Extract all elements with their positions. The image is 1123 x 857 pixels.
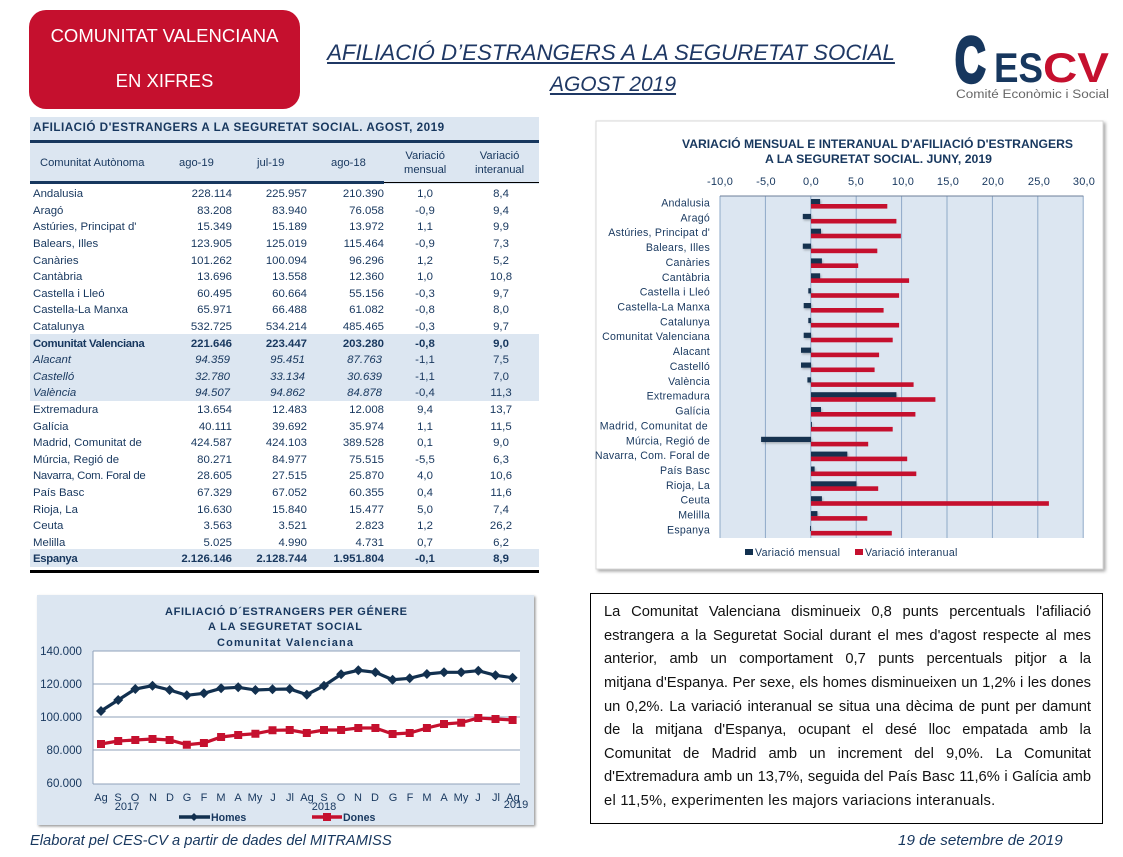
- row: Galícia: [33, 421, 512, 433]
- bar chart panel: variació mensual e interanual: [595, 120, 1108, 574]
- row: Astúries: 15.349: [197, 221, 232, 233]
- text block: summary: anterior, amb un comportament 0,7 punts percentuals pitjor a la: [604, 651, 1091, 667]
- row: Canàries: 96.296: [349, 255, 384, 267]
- row: Rioja: 15.840: [272, 504, 307, 516]
- row: Rioja: Rioja, La: [33, 504, 78, 516]
- row: Rioja: 7,4: [493, 504, 509, 516]
- row: Alacant: Alacant: [33, 354, 71, 366]
- category labels: Múrcia, Regió de: [626, 435, 710, 447]
- row: Navarra: 4,0: [417, 470, 433, 482]
- row: Galícia: 11,5: [490, 421, 512, 433]
- row: Alacant: [32, 354, 509, 366]
- table title band: [30, 117, 539, 140]
- x axis labels: Ag: [506, 792, 520, 804]
- row: Rioja: [33, 504, 509, 516]
- text block: summary: un 0,2%. La variació interanual se situa una dècima de punt per damunt: [604, 699, 1091, 715]
- x axis labels: J: [270, 792, 276, 804]
- row: Galícia: Galícia: [33, 421, 68, 433]
- row: Múrcia: 75.515: [349, 454, 384, 466]
- row: Alacant: 87.763: [347, 354, 382, 366]
- row: Alacant: 7,5: [493, 354, 509, 366]
- row: Aragó: Aragó: [33, 205, 63, 217]
- row: Balears: -0,9: [415, 238, 435, 250]
- row: Madrid: [33, 437, 509, 449]
- table header: Variació: [405, 150, 445, 162]
- x axis labels: N: [354, 792, 362, 804]
- row: País Basc: 67.329: [197, 487, 232, 499]
- row: Comunitat Valenciana: [33, 338, 509, 350]
- legend: Dones: [343, 812, 375, 824]
- row: Ceuta: [33, 520, 512, 532]
- row: Castelló: 33.134: [270, 371, 305, 383]
- category labels: Astúries, Principat d': [608, 227, 710, 239]
- row: Cantàbria: [33, 271, 512, 283]
- category labels: País Basc: [660, 465, 710, 477]
- row: Castelló: [33, 371, 509, 383]
- row: Múrcia: [33, 454, 509, 466]
- category labels: Castella i Lleó: [640, 287, 710, 299]
- text block: summary: d'Extremadura amb un 13,7%, seguida del País Basc 11,6% i Galícia amb: [604, 769, 1091, 785]
- row: Comunitat Valenciana: 9,0: [493, 338, 509, 350]
- row: Melilla: [33, 537, 509, 549]
- x axis labels: 2017: [115, 801, 139, 813]
- y axis labels: 60.000: [47, 777, 82, 790]
- category labels: Alacant: [673, 346, 710, 358]
- row: Múrcia: -5,5: [415, 454, 435, 466]
- category labels: Galícia: [675, 406, 710, 418]
- row: Madrid: 0,1: [417, 437, 433, 449]
- row: Astúries: [33, 221, 509, 233]
- row: Múrcia: 84.977: [272, 454, 307, 466]
- chart title: [165, 605, 407, 649]
- x axis labels: S: [114, 792, 122, 804]
- row: Canàries: 5,2: [493, 255, 509, 267]
- series: variació mensual: [761, 199, 896, 531]
- row: Castella i Lleó: [33, 288, 509, 300]
- plot background: [720, 196, 1083, 538]
- row: València: 11,3: [490, 387, 512, 399]
- row: País Basc: [33, 487, 512, 499]
- legend: [745, 547, 958, 559]
- row: Aragó: 83.940: [272, 205, 307, 217]
- row: Castelló: 32.780: [195, 371, 230, 383]
- row: Madrid: 9,0: [493, 437, 509, 449]
- table header: ago-18: [331, 157, 366, 169]
- row: Castella-La Manxa: 66.488: [272, 304, 307, 316]
- axis labels: 0,0: [803, 176, 819, 188]
- category labels: Canàries: [666, 257, 710, 269]
- row: Cantàbria: 13.558: [272, 271, 307, 283]
- table header: jul-19: [257, 157, 284, 169]
- row: Alacant: -1,1: [415, 354, 435, 366]
- row: Castella-La Manxa: Castella-La Manxa: [33, 304, 128, 316]
- row: Balears: 115.464: [344, 238, 384, 250]
- row: Catalunya: 534.214: [266, 321, 307, 333]
- category labels: Ceuta: [680, 495, 710, 507]
- row: Espanya: 2.128.744: [256, 553, 307, 565]
- row: Alacant: 94.359: [195, 354, 230, 366]
- chart title: A LA SEGURETAT SOCIAL. JUNY, 2019: [765, 152, 992, 166]
- row: Múrcia: Múrcia, Regió de: [33, 454, 119, 466]
- row: València: [33, 387, 512, 399]
- row: Madrid: Madrid, Comunitat de: [33, 437, 142, 449]
- row: Canàries: [33, 255, 509, 267]
- row: Castelló: -1,1: [415, 371, 435, 383]
- category labels: Andalusia: [661, 198, 710, 210]
- text block: summary: La Comunitat Valenciana disminueix 0,8 punts percentuals l'afiliació: [604, 604, 1091, 620]
- row: Balears: 123.905: [191, 238, 232, 250]
- category labels: Espanya: [667, 524, 710, 536]
- row: Extremadura: 12.483: [272, 404, 307, 416]
- row: Comunitat Valenciana: 223.447: [266, 338, 307, 350]
- chart title: [682, 137, 1073, 166]
- legend: Homes: [211, 812, 246, 824]
- row: Catalunya: 9,7: [493, 321, 509, 333]
- row: València: València: [33, 387, 76, 399]
- table panel: afiliació per comunitat: [30, 117, 539, 573]
- category labels: Aragó: [680, 212, 710, 224]
- row: Madrid: 424.587: [191, 437, 232, 449]
- row: Navarra: [33, 470, 512, 482]
- y axis labels: 140.000: [40, 645, 82, 658]
- x axis labels: S: [320, 792, 328, 804]
- x axis labels: F: [407, 792, 414, 804]
- x axis labels: Ag: [94, 792, 108, 804]
- axis labels: -5,0: [756, 176, 776, 188]
- row: Castella-La Manxa: 65.971: [197, 304, 232, 316]
- row: Castella i Lleó: 60.664: [272, 288, 307, 300]
- row: Castelló: Castelló: [33, 371, 74, 383]
- row: Catalunya: [33, 321, 509, 333]
- row: Aragó: [33, 205, 509, 217]
- category labels: Cantàbria: [662, 272, 710, 284]
- row: Canàries: 100.094: [266, 255, 307, 267]
- legend: [179, 812, 375, 824]
- text block: summary: de la mitjana d'Espanya, ocupant el desé lloc empatada amb la: [604, 722, 1091, 738]
- row: País Basc: País Basc: [33, 487, 84, 499]
- badge: Comunitat Valenciana en xifres: [29, 10, 300, 109]
- x axis labels: A: [234, 792, 242, 804]
- row: Castella-La Manxa: -0,8: [415, 304, 435, 316]
- text block: summary: mitjana d'Espanya. Per sexe, els homes disminueixen un 1,2% i les dones: [604, 675, 1091, 691]
- row: Madrid: 424.103: [266, 437, 307, 449]
- row: Balears: 125.019: [266, 238, 307, 250]
- row: Castelló: 30.639: [347, 371, 382, 383]
- x axis labels: O: [337, 792, 346, 804]
- row: Aragó: 83.208: [197, 205, 232, 217]
- row: Extremadura: 9,4: [417, 404, 433, 416]
- row: Astúries: 15.189: [272, 221, 307, 233]
- row: Extremadura: Extremadura: [33, 404, 98, 416]
- series: homes: [96, 665, 518, 716]
- row: Catalunya: Catalunya: [33, 321, 84, 333]
- axis labels: 10,0: [892, 176, 914, 188]
- axis labels: 25,0: [1028, 176, 1050, 188]
- plot area: [93, 651, 520, 784]
- x axis labels: A: [440, 792, 448, 804]
- row: Múrcia: 80.271: [197, 454, 232, 466]
- x axis labels: Jl: [286, 792, 294, 804]
- row: Castella i Lleó: Castella i Lleó: [33, 288, 105, 300]
- table header: ago-19: [179, 157, 214, 169]
- row: Navarra: Navarra, Com. Foral de: [33, 470, 145, 482]
- footer: source: Elaborat pel CES-CV a partir de dades del MITRAMISS: [30, 833, 392, 849]
- row: Múrcia: 6,3: [493, 454, 509, 466]
- chart title: Comunitat Valenciana: [217, 637, 354, 649]
- row: Galícia: 35.974: [349, 421, 384, 433]
- chart title: VARIACIÓ MENSUAL E INTERANUAL D'AFILIACIÓ D'ESTRANGERS: [682, 137, 1073, 151]
- row: València: 84.878: [347, 387, 382, 399]
- x axis labels: Ag: [300, 792, 314, 804]
- row: Comunitat Valenciana: Comunitat Valenciana: [33, 338, 144, 350]
- subtitle: AGOST 2019: [550, 73, 676, 96]
- row: Melilla: 6,2: [493, 537, 509, 549]
- category labels: Extremadura: [647, 391, 710, 403]
- row: Castelló: 7,0: [493, 371, 509, 383]
- logo: CES-CV: Comité Econòmic i Social: [956, 87, 1109, 101]
- row: Andalusia: [33, 188, 509, 200]
- row: Navarra: 25.870: [349, 470, 384, 482]
- row: Castella i Lleó: 9,7: [493, 288, 509, 300]
- legend: Variació mensual: [755, 547, 840, 559]
- chart title: AFILIACIÓ D´ESTRANGERS PER GÉNERE: [165, 605, 407, 618]
- table title band: AFILIACIÓ D'ESTRANGERS A LA SEGURETAT SOCIAL. AGOST, 2019: [33, 121, 445, 134]
- x axis labels: M: [422, 792, 432, 804]
- row: Astúries: 1,1: [417, 221, 433, 233]
- row: Andalusia: 1,0: [417, 188, 433, 200]
- row: Ceuta: Ceuta: [33, 520, 63, 532]
- row: Balears: Balears, Illes: [33, 238, 98, 250]
- row: Aragó: 76.058: [349, 205, 384, 217]
- y axis labels: 100.000: [40, 711, 82, 724]
- axis labels: 30,0: [1073, 176, 1095, 188]
- x axis labels: M: [216, 792, 226, 804]
- row: València: -0,4: [415, 387, 435, 399]
- row: País Basc: 0,4: [417, 487, 433, 499]
- y axis labels: 80.000: [47, 744, 82, 757]
- row: Melilla: 0,7: [417, 537, 433, 549]
- highlighted block: Comunitat Valenciana: [30, 334, 539, 401]
- row: Balears: [33, 238, 509, 250]
- category labels: Navarra, Com. Foral de: [595, 450, 710, 462]
- row: Ceuta: 1,2: [417, 520, 433, 532]
- axis labels: 20,0: [982, 176, 1004, 188]
- x axis labels: O: [131, 792, 140, 804]
- text block: summary: estrangera a la Seguretat Social durant el mes d'agost respecte al mes: [604, 628, 1091, 644]
- axis labels: [707, 176, 1095, 188]
- row: Canàries: Canàries: [33, 255, 79, 267]
- table header: Comunitat Autònoma: [40, 157, 144, 169]
- badge: Comunitat Valenciana en xifres: EN XIFRES: [116, 70, 213, 91]
- row: Cantàbria: 10,8: [490, 271, 512, 283]
- x axis labels: [94, 792, 528, 813]
- table bottom rule: [30, 570, 539, 573]
- logo: CES-CV: [955, 30, 1109, 101]
- highlighted row band: Espanya: [30, 549, 539, 567]
- line chart panel: afiliació per gènere: [37, 595, 537, 828]
- y axis labels: [40, 645, 82, 790]
- row: Castella-La Manxa: 61.082: [349, 304, 384, 316]
- row: Espanya: Espanya: [33, 553, 77, 565]
- series: variació interanual: [811, 204, 1049, 536]
- category labels: Castelló: [670, 361, 710, 373]
- category labels: Madrid, Comunitat de: [600, 420, 708, 432]
- x axis labels: Jl: [492, 792, 500, 804]
- row: Espanya: 8,9: [493, 553, 509, 565]
- legend: Variació interanual: [865, 547, 958, 559]
- row: Catalunya: -0,3: [415, 321, 435, 333]
- category labels: Rioja, La: [666, 480, 710, 492]
- row: València: 94.862: [270, 387, 305, 399]
- text block: summary: Comunitat de Madrid amb un increment del 9,0%. La Comunitat: [604, 746, 1091, 762]
- row: País Basc: 60.355: [349, 487, 384, 499]
- x axis labels: G: [389, 792, 397, 804]
- row: Extremadura: 13,7: [490, 404, 512, 416]
- row: Extremadura: [33, 404, 512, 416]
- row: Andalusia: 8,4: [493, 188, 509, 200]
- row: Melilla: 5.025: [203, 537, 232, 549]
- row: Andalusia: 225.957: [266, 188, 307, 200]
- category labels: Castella-La Manxa: [617, 302, 710, 314]
- series: dones: [97, 714, 517, 749]
- row: Canàries: 1,2: [417, 255, 433, 267]
- row: Castella i Lleó: 55.156: [349, 288, 384, 300]
- row: Alacant: 95.451: [270, 354, 305, 366]
- logo: CES-CV: CV: [1043, 44, 1109, 91]
- row: Castella-La Manxa: 8,0: [493, 304, 509, 316]
- row: Balears: 7,3: [493, 238, 509, 250]
- chart title: A LA SEGURETAT SOCIAL: [208, 621, 362, 633]
- category labels: Comunitat Valenciana: [602, 331, 710, 343]
- x axis labels: My: [248, 792, 263, 804]
- row: Madrid: 389.528: [343, 437, 384, 449]
- logo: CES-CV: ES: [994, 44, 1043, 91]
- row: Melilla: 4.731: [355, 537, 384, 549]
- text block: summary: el 11,5%, experimenten les majors variacions interanuals.: [604, 793, 996, 809]
- row: Navarra: 10,6: [490, 470, 512, 482]
- row: Castella i Lleó: 60.495: [197, 288, 232, 300]
- text block: summary: [590, 593, 1103, 824]
- row: Rioja: 15.477: [349, 504, 384, 516]
- x axis labels: D: [371, 792, 379, 804]
- row: Ceuta: 3.521: [278, 520, 307, 532]
- row: Espanya: [33, 553, 509, 565]
- title: AFILIACIÓ D’ESTRANGERS A LA SEGURETAT SOCIAL: [327, 40, 895, 65]
- row: Rioja: 5,0: [417, 504, 433, 516]
- row: Comunitat Valenciana: 203.280: [343, 338, 384, 350]
- axis labels: -10,0: [707, 176, 733, 188]
- row: Ceuta: 3.563: [203, 520, 232, 532]
- footer: date: 19 de setembre de 2019: [898, 832, 1063, 849]
- category labels: Melilla: [678, 510, 710, 522]
- row: Comunitat Valenciana: 221.646: [191, 338, 232, 350]
- category labels: [595, 198, 710, 536]
- table header: mensual: [404, 164, 446, 176]
- x axis labels: G: [183, 792, 191, 804]
- x axis labels: 2018: [312, 801, 336, 813]
- x axis labels: J: [475, 792, 481, 804]
- row: Andalusia: 210.390: [343, 188, 384, 200]
- row: Navarra: 28.605: [197, 470, 232, 482]
- category labels: Catalunya: [660, 316, 710, 328]
- row: Ceuta: 26,2: [490, 520, 512, 532]
- row: Espanya: -0,1: [415, 553, 435, 565]
- category labels: Balears, Illes: [646, 242, 710, 254]
- row: Extremadura: 12.008: [349, 404, 384, 416]
- row: Andalusia: Andalusia: [33, 188, 83, 200]
- x axis labels: My: [454, 792, 469, 804]
- row: Catalunya: 532.725: [191, 321, 232, 333]
- y axis labels: 120.000: [40, 678, 82, 691]
- row: Astúries: Astúries, Principat d': [33, 221, 136, 233]
- table header: Variació: [480, 150, 519, 162]
- row: Canàries: 101.262: [191, 255, 232, 267]
- row: Cantàbria: 1,0: [417, 271, 433, 283]
- row: Navarra: 27.515: [272, 470, 307, 482]
- row: Castella-La Manxa: [33, 304, 509, 316]
- row: País Basc: 67.052: [272, 487, 307, 499]
- axis labels: 15,0: [937, 176, 959, 188]
- row: Galícia: 39.692: [272, 421, 307, 433]
- row: Andalusia: 228.114: [192, 188, 232, 200]
- x axis labels: N: [149, 792, 157, 804]
- row: València: 94.507: [195, 387, 230, 399]
- row: Extremadura: 13.654: [197, 404, 232, 416]
- row: Catalunya: 485.465: [343, 321, 384, 333]
- row: País Basc: 11,6: [490, 487, 512, 499]
- badge: Comunitat Valenciana en xifres: COMUNITAT VALENCIANA: [51, 25, 278, 46]
- row: Galícia: 40.111: [199, 421, 232, 433]
- row: Melilla: Melilla: [33, 537, 65, 549]
- row: Comunitat Valenciana: -0,8: [415, 338, 435, 350]
- row: Melilla: 4.990: [278, 537, 307, 549]
- row: Astúries: 13.972: [349, 221, 384, 233]
- table header: [30, 140, 539, 184]
- row: Castella i Lleó: -0,3: [415, 288, 435, 300]
- row: Ceuta: 2.823: [355, 520, 384, 532]
- x axis labels: D: [166, 792, 174, 804]
- category labels: València: [668, 376, 710, 388]
- row: Cantàbria: 12.360: [349, 271, 384, 283]
- table header: interanual: [475, 164, 524, 176]
- row: Cantàbria: Cantàbria: [33, 271, 82, 283]
- row: Cantàbria: 13.696: [197, 271, 232, 283]
- axis labels: 5,0: [848, 176, 864, 188]
- row: Galícia: 1,1: [417, 421, 433, 433]
- x axis labels: 2019: [504, 799, 528, 811]
- x axis labels: F: [201, 792, 208, 804]
- row: Rioja: 16.630: [197, 504, 232, 516]
- row: Astúries: 9,9: [493, 221, 509, 233]
- row: Espanya: 1.951.804: [333, 553, 384, 565]
- row: Aragó: -0,9: [415, 205, 435, 217]
- row: Espanya: 2.126.146: [181, 553, 232, 565]
- row: Aragó: 9,4: [493, 205, 509, 217]
